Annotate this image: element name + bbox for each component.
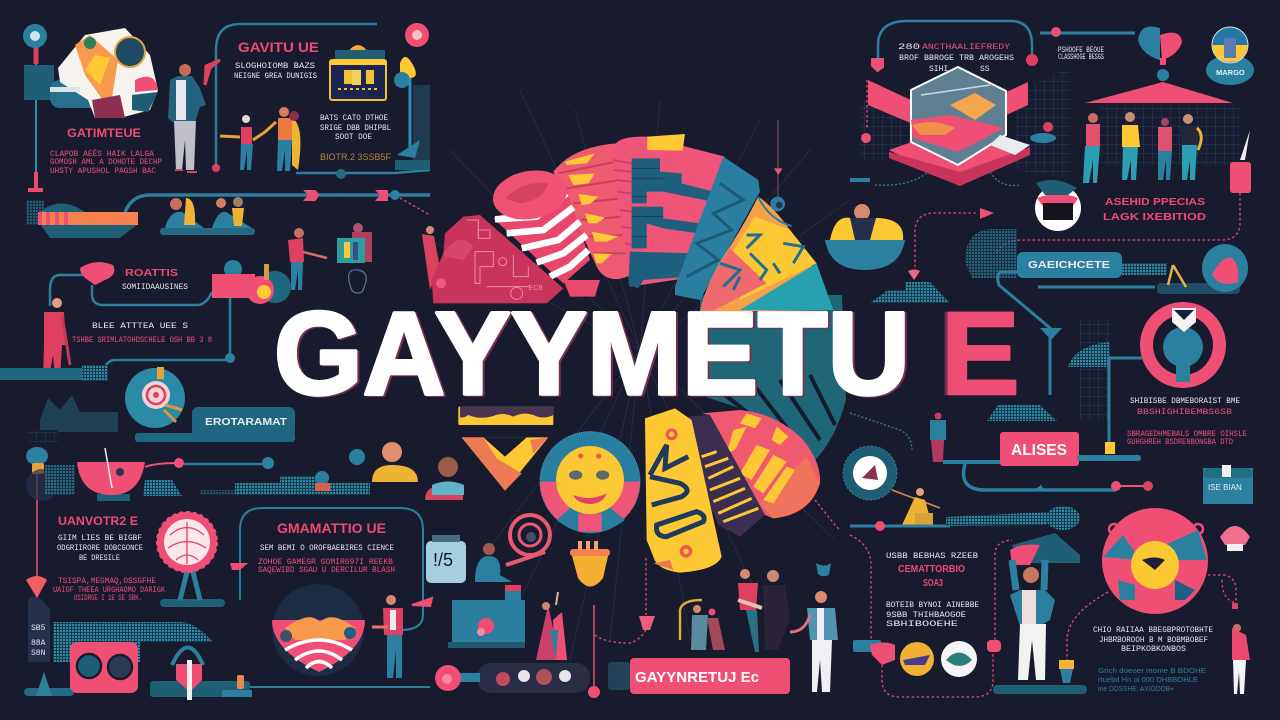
heading: roadmap label: ROATTIS [125,267,178,279]
icon: flower pill strip [477,663,590,693]
title: E [941,288,1020,420]
text block: figure note: SRIGE DBB DHIPBL [320,124,391,133]
lower-left machines [24,622,430,700]
icon: target ring [1105,302,1226,454]
text block: framed pink: ZOHOE GAMEGR GOMIR697I REEKB [258,558,393,567]
dashed teal curve [850,413,912,450]
icon: pink pot with yellow centre [1102,508,1208,614]
connector frame [240,508,423,630]
label: EROTARAMAT: EROTARAMAT [205,416,288,428]
left node column: SB5 [31,624,46,633]
icon: white disc with teal ring [843,446,897,500]
text block: pot white: CHIO RAIIAA BBEGBPROTOBHTE [1093,626,1213,635]
heading: skull section: GATIMTEUE [67,128,141,140]
panel: connector row with boat [26,190,430,238]
text lines: right note [1058,46,1104,62]
text line: framed white: SEM BEMI O OROFBAEBIRES CIENCE [260,544,394,553]
fan blade: teal zigzag [675,157,760,300]
figure: portrait bust [349,442,418,482]
icon: tray with tools and pink-teal disc [1157,244,1248,294]
text block: central column: BOTEIB BYNOI AINEBBE [886,601,979,610]
text block: lower-left pink: OSIDRGE I 1E SE SBK. [74,594,142,603]
icon: teal banner box [1203,465,1253,504]
label: GAYYNRETUJ Ec [630,658,790,694]
icon: pink node and teal figure [394,23,430,170]
icon: yellow cup with fingers [570,541,610,586]
text block: pot white: JHBRBOROOH B M BOBMBOBEF [1099,636,1208,645]
icon: orange ribbed balloon [702,410,820,518]
text block: arch text [898,43,1014,74]
text block: pot teal: Grich doeoer mome B BDOHE [1098,666,1206,675]
icon: gold machine panel [330,45,386,100]
icon: colourful skull collage [24,28,158,118]
left node column: S8N [31,649,46,658]
icon: teal banner box: ISE BIAN [1208,483,1242,492]
text lines: right note: PSHOOFE BEOUE [1058,46,1104,55]
icon: capsule with arch [150,648,250,700]
figure: woman with coloured screen [337,223,372,293]
icon: date card [426,535,466,583]
text block: lower-left white: GIIM LIES BE BIGBF [58,534,142,543]
icon: pink cup [315,471,330,491]
icon: spiral disc [125,367,185,428]
connector arch [878,21,1032,72]
icon: pink roof pavilion [1085,69,1240,165]
text block: figure note [320,114,391,142]
text block: figure note: SOOT DOE [335,133,372,142]
text block: framed intro: SLOGHOIOMB BAZS [235,62,315,71]
pipeline with pink machine [50,260,291,368]
text block: figure note: BATS CATO DTHOE [320,114,388,123]
text line: SOMIIDAAUSINES [122,283,188,292]
connectors to bottom [588,558,655,698]
icon: white disc [941,641,977,677]
text block: arch text: 280 [898,43,920,52]
panel: right top hexagon book [825,21,1254,303]
figure: standing man in blue jacket [168,64,206,172]
left node column: 88A [31,639,46,648]
fan blade: orange striped [553,143,633,279]
text block: arch text: ANCTHAALIEFREDY [922,43,1010,52]
text block: central column: SOA3 [923,578,943,589]
figure: family with arch [680,600,725,650]
icon: yellow and teal brush [1059,660,1074,683]
icon: yellow wave bar [458,407,553,425]
text block: pot teal: Ine DOSSHE: AXIOOOB+ [1098,684,1175,693]
teal lower loop [943,458,1153,491]
text block: lower-left white: ODGRIIRORE DOBCGONCE [57,544,143,553]
icon: bowl with person [825,204,905,270]
text block: pot teal: rtuebd Hn oi 000 DHBBOHLE [1098,675,1198,684]
icon: yellow panel with 5 and 0 [645,408,722,573]
fan blade: maze pattern [700,120,833,312]
figure: two men in dark coats [738,569,790,652]
icon: striped boat [26,200,138,238]
icon: date card: !/5 [433,550,453,570]
grid backdrop [860,67,1070,178]
heading: framed: GMAMATTIO UE [277,520,386,536]
grid and dome behind connector [1068,320,1110,420]
icon: isometric book with hexagon [861,67,1030,186]
figure: man in light blue coat [790,591,838,692]
panel: top-left framed GAVITU UE section [205,23,430,179]
text block: skull section caption: UHSTY APUSHOL PAGSH BAC [50,167,156,176]
icon: yellow V pattern [462,437,548,491]
dashed left curve [850,535,871,640]
dashed pot connectors [1067,575,1238,660]
label: GAEICHCETE [1017,252,1122,278]
dotted data strips [143,476,370,496]
text block: central column: SBHIBOOEHE [886,620,958,629]
panel: lower-right [850,508,1250,697]
text block: skull section caption: GOMOSH AML A DOHOTE DECHP [50,158,162,167]
label: GAEICHCETE: GAEICHCETE [1028,259,1110,271]
text lines: right note: CLASSHOGE BESGS [1058,53,1104,62]
icon: pink small creature [1220,526,1250,551]
dim machine shapes [28,395,118,442]
heading: lower-left: UANVOTR2 E [58,514,138,528]
text block: target caption: GUHGHREH BSDRENBONGBA DTD [1127,438,1233,447]
text block: framed pink: SAQEWIBD SGAU U DERCILUR BLASH [258,566,395,575]
text block: target caption [1127,397,1247,447]
dotted pipeline [850,506,1080,531]
text block: framed pink [258,558,395,575]
pipeline: lower teal bar [0,365,108,381]
dotted dome [965,229,1017,278]
figure: seated person [475,543,521,600]
heading: pink two lines: ASEHID PPECIAS [1105,196,1205,208]
icon: dark yellow-striped comb [688,415,765,537]
label: ALISES [1000,432,1079,466]
text block: lower-left white [57,534,143,563]
fan blade: pink and blue blocks [612,134,725,288]
small icon: teal cup [816,563,831,576]
fan blade: maroon circuit triangle [432,215,563,303]
text block: Blee section: TSHBE SRIMLATOHDSCHELE OSH BB 3 8 [72,336,212,345]
text block: target caption: SHIBISBE DBMEBORAIST BME [1130,397,1240,406]
text block: arch text: SS [980,65,990,74]
figure: man in red suit [43,298,70,378]
figure: small person with pink skirt [930,412,946,462]
label: ALISES: ALISES [1011,442,1067,459]
heading: pink two lines [1103,196,1207,223]
text block: pot teal [1098,666,1206,693]
text block: central column: CEMATTORBIO [898,564,965,575]
icon: pink flower brain with figure [157,512,225,607]
panel: bottom centre [426,500,840,698]
icon: small bottle on tray [222,675,252,697]
panel: lower-left bowl row [24,442,464,700]
text block: lower-left white: BE DRESILE [79,554,120,563]
panel: right middle [843,229,1253,551]
text block: target caption: BBSHIGHIBEMBS6SB [1137,408,1232,417]
connector line with arrows [125,190,430,215]
dashed arrow [870,208,994,303]
heading: pink two lines: LAGK IXEBITIOD [1103,211,1207,223]
figure: man with raised arm [993,533,1087,694]
icon: white circle with figures [1035,180,1081,231]
text block: lower-left pink [53,577,165,603]
title: GAYYMETU [274,288,910,420]
figure: kneeling person [892,488,940,525]
panel: framed GMAMATTIO section [230,508,432,678]
text block: framed intro [234,62,317,81]
text block: pot white: BEIPKOBKONBOS [1121,645,1186,654]
text block: central column: 9SBB THIHBAOGOE [886,611,966,620]
icon: goggles card [24,642,138,696]
text block: pot white [1093,626,1213,654]
panel: lower centre shapes [458,407,820,573]
icon: MARGO badge [1206,27,1254,85]
label: EROTARAMAT [135,407,295,442]
figure: two people talking [220,107,300,171]
text block: target caption: SBRAGEDHMEBALS OMBRE OIHSLE [1127,430,1247,439]
icon: pink block with blade [997,130,1251,252]
connector frame [216,24,377,165]
icon: smiling face disc [540,432,640,533]
connector with half heart [1040,26,1182,65]
figure: man in red vest [372,595,403,678]
icon: MARGO badge: MARGO [1216,68,1245,77]
panel: left middle [0,223,440,442]
figure: woman in pink [1232,624,1250,694]
figure: bust near centre [425,457,464,500]
text block: lower-left pink: TSISPA,MEGMAQ,OSSGFHE [58,577,156,586]
icon: pink bowl [77,448,145,501]
text block: arch text: BROF BBROGE TRB AROGEHS [899,54,1014,63]
heading: framed section: GAVITU UE [238,39,319,55]
left node column [26,447,75,662]
text block: Blee section: BLEE ATTTEA UEE S [92,322,188,331]
icon: teal screen [448,600,525,648]
icon: pink blob on teal bar [853,640,895,665]
dashed connectors [850,172,1020,185]
text block: gold numbers: BIOTR.2 3SSB5F [320,152,391,162]
icon: teal node with vertical connector [23,24,47,190]
figure: person with striped ribbon [288,228,327,290]
text block: Blee section [72,322,212,345]
figure: women group [536,592,567,660]
small teal tray [1030,122,1056,143]
figures: four people under roof [1083,112,1201,183]
dotted strip right of label [1122,263,1167,275]
icon: yellow disc [900,642,934,676]
text block: central column: USBB BEBHAS RZEEB [886,552,978,561]
dashed lower loop [882,540,1012,697]
teal blade behind title [700,295,846,460]
icon: striped heart [272,584,365,676]
fan blade: striped roll [489,165,600,297]
teal pipeline [987,272,1155,421]
panel: central fan illustration [432,120,833,312]
text block: central column [886,552,979,629]
dim machine card [608,662,630,690]
panel: top-left skull section [23,24,206,190]
connector with nodes [145,457,274,469]
text block: skull section caption: CLAPOB AEÉS HAIK LALGA [50,150,154,159]
figure: seated group [160,197,255,235]
text block: skull section caption [50,150,162,176]
text block: lower-left pink: UAIGF THEEA URGHAOMO DARIGK [53,586,165,595]
figure: person beside fan [422,226,440,290]
dotted teal shape [53,622,213,662]
fan blade: maroon circuit triangle: EC8 [528,283,543,292]
text block: framed intro: NEIGNE GREA DUNIGIS [234,72,317,81]
label: GAYYNRETUJ Ec: GAYYNRETUJ Ec [635,669,759,686]
icon: pink circle with bar [435,665,480,691]
text block: arch text: SIHI [929,65,948,74]
icon: pink spiral [506,515,550,565]
